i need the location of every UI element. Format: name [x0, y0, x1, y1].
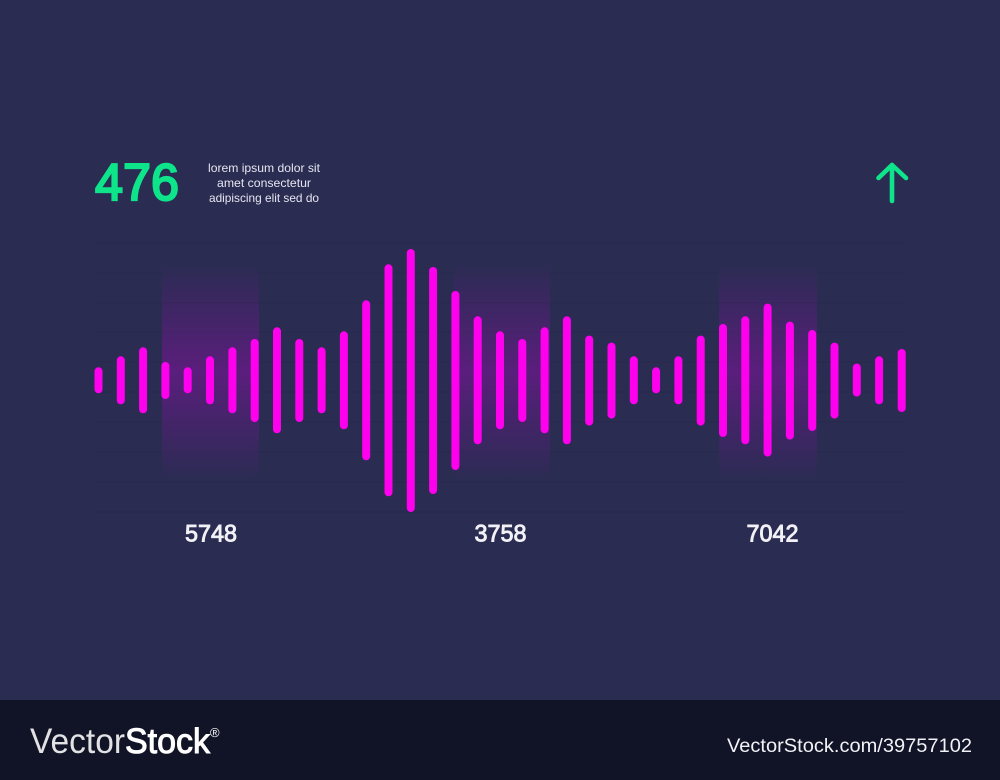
- footer bar: [0, 700, 1000, 780]
- footer url: VectorStock.com/39757102: [727, 736, 972, 757]
- footer logo: ®: [210, 725, 220, 740]
- description text: [208, 161, 321, 205]
- value labels: [185, 520, 798, 548]
- description text: amet consectetur: [217, 176, 311, 190]
- highlight band 2: [453, 264, 550, 480]
- description text: adipiscing elit sed do: [209, 191, 319, 205]
- big number: 476: [95, 154, 179, 212]
- value labels: 7042: [746, 520, 798, 548]
- value labels: 3758: [474, 520, 526, 548]
- footer logo: [30, 722, 220, 761]
- highlight band 1: [162, 264, 259, 480]
- value labels: 5748: [185, 520, 237, 548]
- icon: up arrow: [878, 165, 906, 201]
- highlight bands: [162, 264, 817, 480]
- highlight band 3: [719, 264, 817, 480]
- sound wave bars: [94, 249, 906, 512]
- footer logo: Stock: [125, 722, 210, 761]
- footer logo: Vector: [30, 722, 125, 761]
- description text: lorem ipsum dolor sit: [208, 161, 321, 175]
